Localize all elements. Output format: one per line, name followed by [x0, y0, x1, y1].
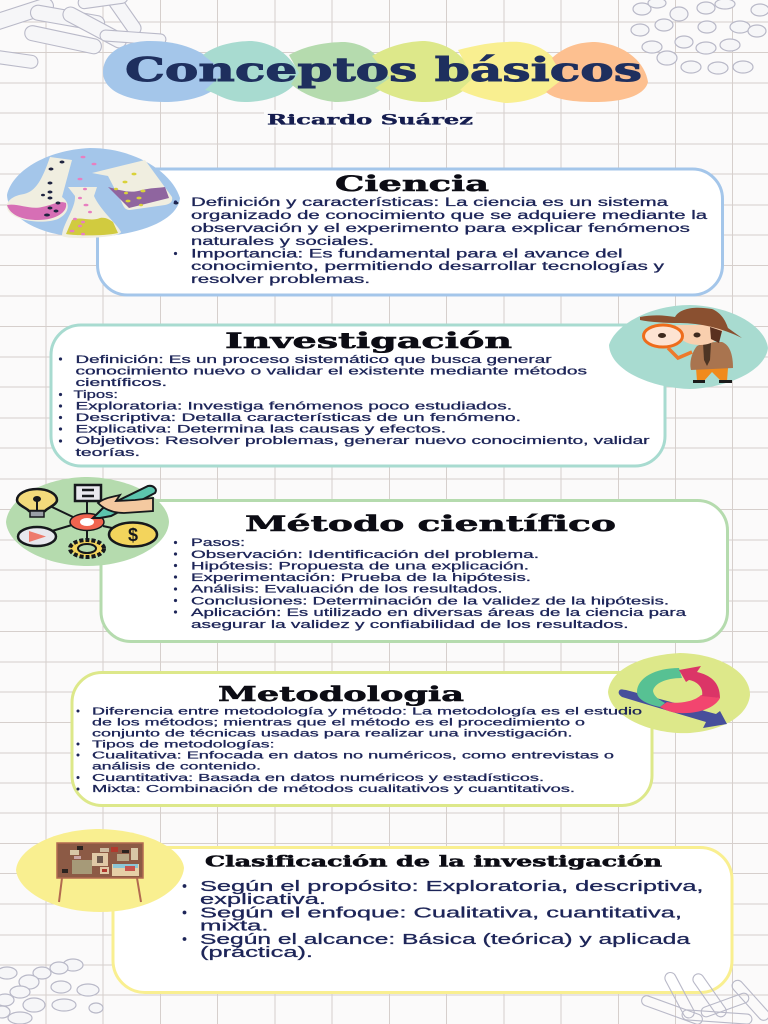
bullet list: método científico	[174, 537, 687, 631]
bullet list: ciencia: organizado de conocimiento que se adquiere mediante la	[191, 210, 708, 222]
decoration: bacteria bottom left	[0, 959, 103, 1024]
bullet list: ciencia: conocimiento, permitiendo desarrollar tecnologías y	[191, 261, 664, 273]
bullet list: metodologia: Mixta: Combinación de métodos cualitativos y cuantitativos.	[92, 783, 575, 795]
bullet list: método científico: Hipótesis: Propuesta de una explicación.	[191, 560, 529, 572]
bullet list: investigación	[59, 354, 650, 459]
bullet list: método científico: Pasos:	[191, 537, 245, 549]
heading: método científico: Método científico	[245, 511, 616, 536]
bullet list: clasificación: Según el propósito: Exploratoria, descriptiva,	[200, 879, 704, 895]
panel: método científico	[6, 477, 728, 642]
bullet list: ciencia: naturales y sociales.	[191, 236, 374, 248]
bullet list: metodologia: análisis de contenido.	[92, 760, 261, 772]
bullet list: metodologia: Cuantitativa: Basada en datos numéricos y estadísticos.	[92, 772, 544, 784]
icon: cork board	[16, 829, 184, 912]
bullet list: método científico: Aplicación: Es utilizado en diversas áreas de la ciencia para	[191, 607, 687, 619]
icon: cycle and arrow	[608, 653, 750, 733]
bullet list: método científico: Observación: Identificación del problema.	[191, 549, 539, 561]
bullet list: investigación: Objetivos: Resolver problemas, generar nuevo conocimiento, validar	[76, 435, 650, 447]
bullet list: investigación: Tipos:	[74, 389, 118, 401]
bullet list: método científico: Análisis: Evaluación de los resultados.	[191, 584, 502, 596]
bullet list: investigación: Definición: Es un proceso sistemático que busca generar	[76, 354, 552, 366]
icon: detective	[609, 305, 768, 389]
bullet list: metodologia: conjunto de técnicas usadas para realizar una investigación.	[92, 728, 572, 740]
author	[264, 110, 476, 128]
bullet list: metodologia: de los métodos; mientras que el método es el procedimiento o	[92, 716, 585, 728]
icon: method diagram	[6, 477, 169, 566]
decoration: bacteria top left	[0, 0, 166, 69]
bullet list: ciencia: Importancia: Es fundamental para el avance del	[191, 248, 622, 260]
heading: investigación: Investigación	[225, 328, 512, 353]
bullet list: clasificación: Según el enfoque: Cualitativa, cuantitativa,	[200, 906, 682, 922]
bullet list: investigación: Explicativa: Determina las causas y efectos.	[76, 424, 446, 436]
bullet list: clasificación: explicativa.	[200, 892, 326, 908]
bullet list: ciencia: resolver problemas.	[191, 274, 370, 286]
panel: metodologia	[72, 653, 750, 806]
icon: lab flasks	[7, 148, 180, 238]
bullet list: clasificación	[183, 879, 703, 961]
bullet list: investigación: científicos.	[76, 377, 167, 389]
panel: ciencia	[7, 148, 723, 295]
heading: metodologia: Metodologia	[218, 682, 464, 706]
bullet list: método científico: Conclusiones: Determinación de la validez de la hipótesis.	[191, 596, 669, 608]
bullet list: metodologia: Diferencia entre metodología y método: La metodología es el estudio	[92, 706, 642, 718]
bullet list: metodologia: Tipos de metodologías:	[92, 738, 274, 750]
bullet list: método científico: asegurar la validez y confiabilidad de los resultados.	[191, 619, 628, 631]
bullet list: metodologia	[77, 706, 642, 795]
bullet list: clasificación: (práctica).	[200, 945, 313, 961]
bullet list: investigación: Exploratoria: Investiga fenómenos poco estudiados.	[76, 400, 512, 412]
bullet list: investigación: teorías.	[76, 447, 140, 459]
bullet list: ciencia	[174, 197, 708, 286]
decoration: bacteria top right	[631, 0, 768, 74]
panel: clasificación de la investigación	[16, 829, 732, 992]
bullet list: clasificación: Según el alcance: Básica (teórica) y aplicada	[200, 932, 692, 948]
bullet list: ciencia: observación y el experimento para explicar fenómenos	[191, 223, 690, 235]
heading: ciencia: Ciencia	[335, 171, 490, 196]
bullet list: clasificación: mixta.	[200, 918, 268, 934]
bullet list: investigación: conocimiento nuevo o validar el existente mediante métodos	[76, 366, 588, 378]
bullet list: ciencia: Definición y características: La ciencia es un sistema	[191, 197, 669, 209]
icon: method diagram: $	[128, 525, 138, 545]
title: Conceptos básicos	[125, 50, 642, 89]
bullet list: metodologia: Cualitativa: Enfocada en datos no numéricos, como entrevistas o	[92, 750, 614, 762]
panel: investigación	[51, 305, 768, 466]
bullet list: investigación: Descriptiva: Detalla características de un fenómeno.	[76, 412, 521, 424]
bullet list: método científico: Experimentación: Prueba de la hipótesis.	[191, 572, 531, 584]
title background blobs	[103, 41, 648, 103]
decoration: bacteria bottom right	[640, 971, 768, 1024]
author: Ricardo Suárez	[267, 112, 473, 128]
heading: clasificación: Clasificación de la investigación	[205, 852, 662, 870]
